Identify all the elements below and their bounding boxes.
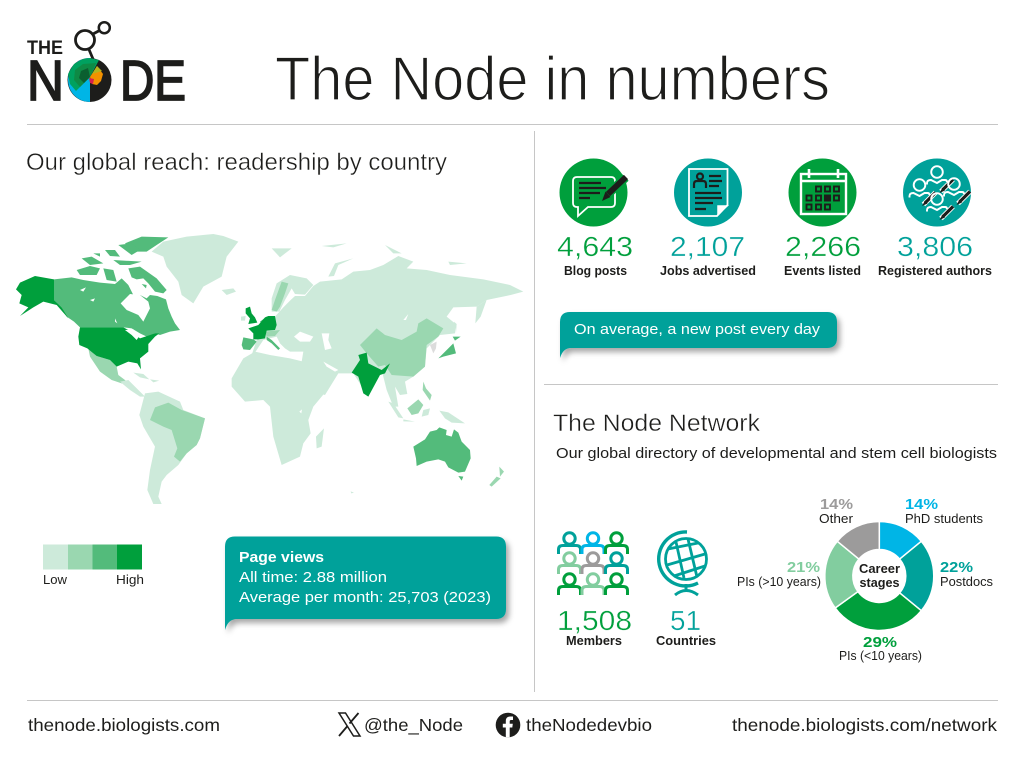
label: phd students bbox=[905, 496, 983, 526]
donut centre label bbox=[859, 562, 900, 590]
stat: countries bbox=[656, 532, 716, 648]
stat: registered authors: 3,806 bbox=[897, 231, 973, 262]
label: other: Other bbox=[819, 512, 853, 526]
map legend: High bbox=[116, 572, 144, 587]
south america and africa bbox=[120, 352, 354, 504]
label: pis over 10 years: 21% bbox=[787, 559, 820, 576]
stat: members: 1,508 bbox=[557, 605, 632, 636]
stat: registered authors bbox=[878, 158, 992, 278]
label: phd students: 14% bbox=[905, 496, 938, 513]
stat: blog posts: 4,643 bbox=[557, 231, 633, 262]
map heading: Our global reach: readership by country bbox=[26, 149, 447, 176]
europe bbox=[241, 282, 288, 350]
logo: The Node: THE bbox=[27, 37, 63, 59]
footer: x handle: @the_Node bbox=[364, 715, 463, 736]
label: pis over 10 years: PIs (>10 years) bbox=[737, 575, 821, 589]
stat: blog posts bbox=[557, 158, 633, 278]
callout: page views: All time: 2.88 million bbox=[239, 569, 387, 586]
north america and greenland bbox=[16, 234, 238, 383]
callout: new post every day bbox=[560, 312, 837, 358]
eurasia bbox=[250, 243, 523, 407]
donut centre label: stages bbox=[860, 576, 900, 590]
callout: page views bbox=[225, 536, 506, 630]
logo: The Node: N bbox=[27, 49, 64, 113]
stat: jobs advertised: Jobs advertised bbox=[660, 263, 756, 278]
footer: website: thenode.biologists.com bbox=[28, 715, 220, 735]
stat: countries: Countries bbox=[656, 634, 716, 648]
donut segments bbox=[825, 522, 934, 630]
stat: members: Members bbox=[566, 634, 622, 648]
stat: jobs advertised bbox=[660, 158, 756, 278]
label: pis under 10 years bbox=[839, 634, 922, 663]
donut chart: career stages bbox=[737, 496, 993, 663]
stat: events listed: Events listed bbox=[784, 263, 861, 278]
callout: page views: Average per month: 25,703 (2023) bbox=[239, 589, 491, 606]
oceania and southeast asia bbox=[388, 382, 504, 487]
label: pis over 10 years bbox=[737, 559, 821, 589]
stat: registered authors: Registered authors bbox=[878, 263, 992, 278]
network subtitle: Our global directory of developmental and stem cell biologists bbox=[556, 445, 997, 462]
network heading: The Node Network bbox=[553, 410, 761, 437]
stat: countries: 51 bbox=[670, 605, 701, 636]
footer: x handle bbox=[339, 713, 463, 736]
logo: The Node bbox=[27, 22, 186, 113]
footer: network url: thenode.biologists.com/network bbox=[732, 715, 997, 735]
stat: events listed: 2,266 bbox=[785, 231, 861, 262]
logo: The Node: DE bbox=[120, 49, 186, 113]
label: pis under 10 years: 29% bbox=[863, 634, 897, 651]
title: The Node in numbers bbox=[275, 45, 830, 114]
footer: facebook bbox=[496, 713, 652, 737]
label: other: 14% bbox=[820, 496, 853, 513]
label: pis under 10 years: PIs (<10 years) bbox=[839, 649, 922, 663]
stat: events listed bbox=[784, 158, 861, 278]
label: postdocs: 22% bbox=[940, 559, 973, 576]
stat: jobs advertised: 2,107 bbox=[670, 231, 745, 262]
label: phd students: PhD students bbox=[905, 512, 983, 526]
stat: members bbox=[557, 533, 632, 648]
callout: new post every day: On average, a new post every day bbox=[574, 321, 821, 338]
stat: blog posts: Blog posts bbox=[564, 263, 627, 278]
label: postdocs bbox=[940, 559, 993, 589]
world map bbox=[16, 234, 523, 504]
map legend bbox=[43, 544, 144, 587]
footer: facebook: theNodedevbio bbox=[526, 715, 652, 735]
callout: page views: Page views bbox=[239, 550, 324, 566]
label: other bbox=[819, 496, 853, 526]
map legend: Low bbox=[43, 572, 68, 587]
donut centre label: Career bbox=[859, 562, 900, 576]
label: postdocs: Postdocs bbox=[940, 575, 993, 589]
